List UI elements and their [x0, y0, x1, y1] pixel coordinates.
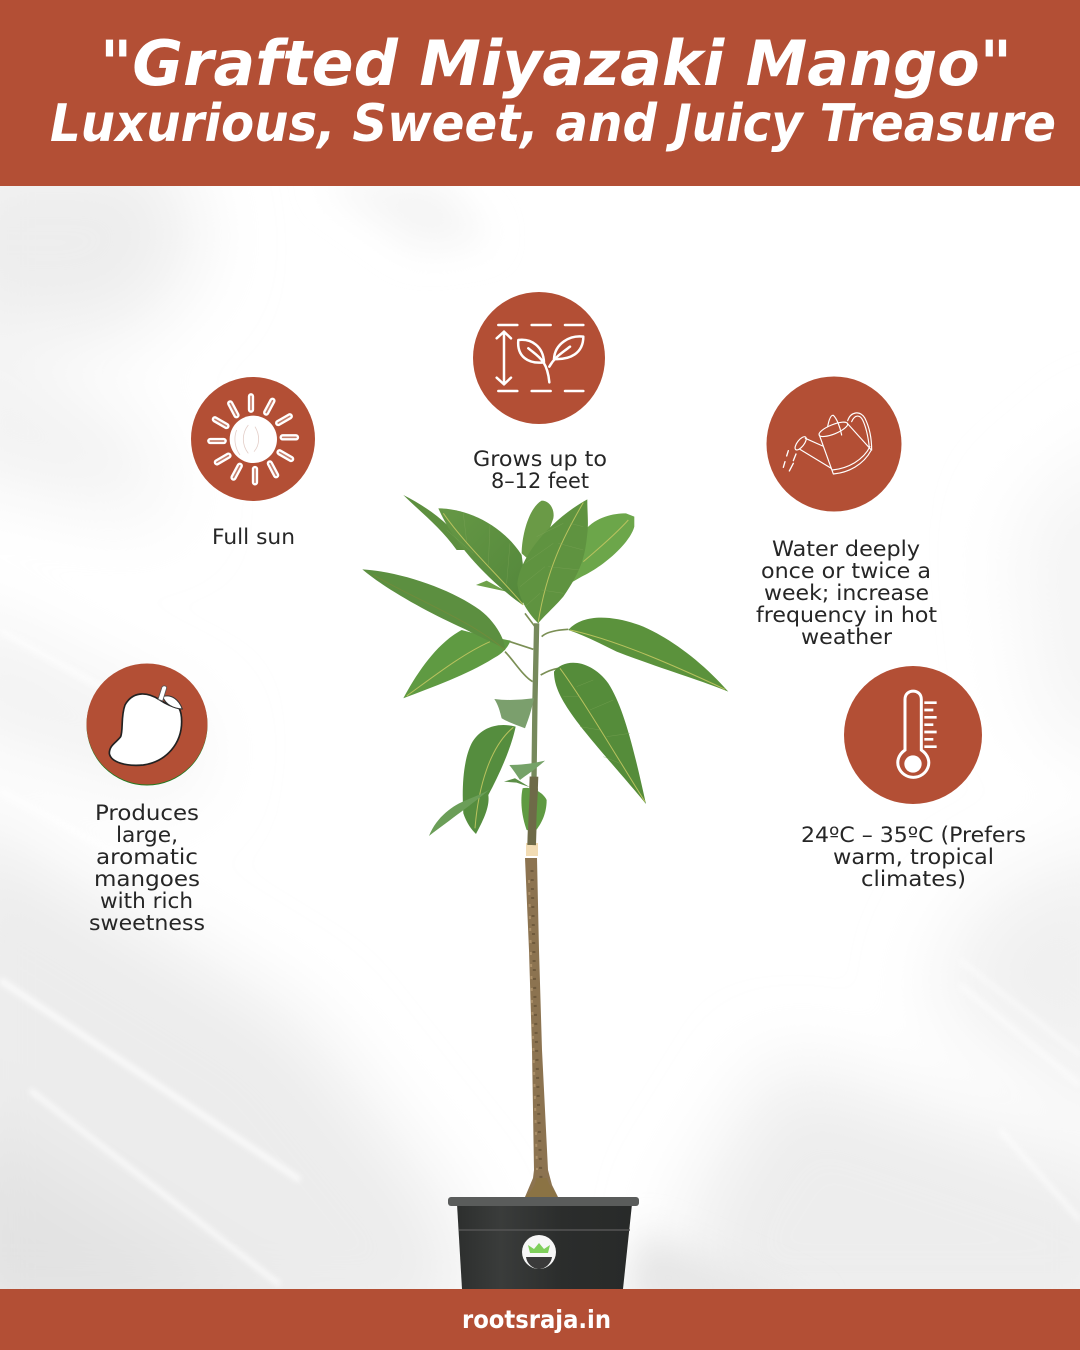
label: water: frequency in hot: [756, 603, 937, 627]
header banner: [0, 0, 1080, 186]
label: water: once or twice a: [761, 559, 931, 583]
label: grows: 8–12 feet: [491, 469, 589, 493]
label: water: Water deeply: [772, 537, 920, 561]
feature: fruit: [86, 664, 208, 935]
icon: watering can: [766, 376, 902, 512]
label: fruit: large,: [116, 823, 178, 847]
icon: sun: [191, 377, 315, 501]
label: water: week; increase: [764, 581, 929, 605]
label: water: [756, 537, 937, 649]
label: grows: Grows up to: [473, 447, 607, 471]
label: fruit: [89, 801, 205, 935]
feature: height: [473, 292, 607, 493]
lower stem: [525, 858, 558, 1197]
icon: thermometer: [844, 666, 982, 804]
title: "Grafted Miyazaki Mango": [100, 27, 1012, 100]
label: fruit: with rich: [100, 889, 193, 913]
leaves: [362, 495, 728, 845]
icon: plant height: [473, 292, 605, 424]
footer banner: [0, 1289, 1080, 1350]
label: fruit: sweetness: [89, 911, 205, 935]
label: temperature: [801, 823, 1026, 891]
label: temperature: climates): [861, 867, 966, 891]
pot logo sticker: [522, 1235, 556, 1269]
feature: temperature: [801, 666, 1026, 891]
mango plant in pot: [362, 495, 728, 1289]
label: full sun: Full sun: [212, 525, 295, 549]
grafting tag: [526, 843, 538, 856]
label: fruit: aromatic: [96, 845, 198, 869]
feature: sun: [191, 377, 315, 549]
label: water: weather: [801, 625, 892, 649]
label: temperature: 24ºC – 35ºC (Prefers: [801, 823, 1026, 847]
label: temperature: warm, tropical: [833, 845, 994, 869]
label: grows: [473, 447, 607, 493]
website: rootsraja.in: [462, 1305, 611, 1334]
label: fruit: Produces: [95, 801, 199, 825]
label: fruit: mangoes: [94, 867, 200, 891]
feature: water: [756, 376, 937, 649]
pot: [448, 1178, 639, 1289]
icon: mango: [86, 664, 208, 786]
